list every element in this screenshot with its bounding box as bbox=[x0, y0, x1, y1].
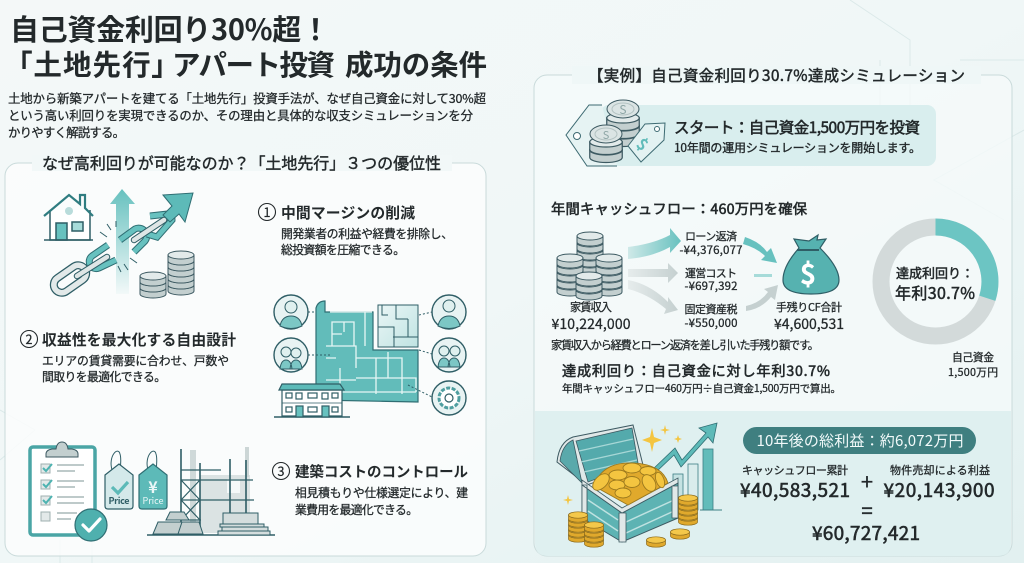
icon: money bag bbox=[783, 235, 839, 294]
chest lid bbox=[557, 425, 643, 485]
item 1: 開発業者の利益や経費を排除し、 bbox=[281, 225, 453, 242]
item 1: 総投資額を圧縮できる。 bbox=[281, 241, 405, 258]
deduction labels: ローン返済 bbox=[685, 228, 737, 244]
title: 「土地先行」 bbox=[18, 43, 166, 84]
donut label bbox=[948, 349, 998, 380]
icon: tag outline and coins: $ bbox=[632, 131, 655, 156]
price tags: Price bbox=[142, 494, 164, 507]
icon: tag outline and coins bbox=[566, 100, 665, 166]
item 2: 収益性を最大化する自由設計 bbox=[42, 329, 236, 350]
item 2 bbox=[20, 329, 236, 385]
panel heading: 【実例】自己資金利回り30.7%達成シミュレーション bbox=[588, 64, 965, 86]
item 3 bbox=[272, 461, 468, 518]
growth chart bbox=[652, 423, 722, 510]
arrows: to remainder bbox=[743, 237, 778, 311]
icon: tag outline and coins: S bbox=[603, 127, 610, 143]
calculation: 物件売却による利益 bbox=[890, 462, 990, 478]
icon: treasure chest and growth bbox=[557, 423, 722, 547]
chain bbox=[51, 214, 172, 296]
sparkles bbox=[563, 425, 682, 505]
item 3: 建築コストのコントロール bbox=[295, 461, 468, 482]
price tags bbox=[105, 451, 167, 509]
item 3: 相見積もりや仕様選定により、建 bbox=[295, 484, 468, 501]
intro text: という高い利回りを実現できるのか、その理由と具体的な収支シミュレーションを分 bbox=[8, 106, 474, 124]
start banner: スタート：自己資金1,500万円を投資 bbox=[674, 116, 920, 138]
arrows: outflows bbox=[628, 228, 681, 314]
yield result: 達成利回り：自己資金に対し年利30.7% bbox=[562, 361, 830, 381]
panel: simulation bbox=[534, 64, 1012, 556]
panel: ten year result bbox=[535, 411, 1011, 556]
item 1: 1 bbox=[264, 202, 271, 221]
calculation: = bbox=[861, 495, 873, 524]
start banner: 10年間の運用シミュレーションを開始します。 bbox=[674, 139, 921, 156]
donut chart: 年利30.7% bbox=[895, 280, 975, 304]
panel heading: なぜ高利回りが可能なのか？「土地先行」３つの優位性 bbox=[42, 150, 441, 174]
calculation: + bbox=[861, 465, 873, 497]
blueprint bbox=[316, 301, 418, 402]
calculation: キャッシュフロー累計 bbox=[742, 462, 848, 478]
start banner bbox=[566, 100, 936, 166]
item 3: 業費用を最適化できる。 bbox=[295, 501, 418, 518]
remainder label bbox=[774, 299, 844, 334]
calculation: ¥60,727,421 bbox=[812, 519, 920, 546]
donut label: 1,500万円 bbox=[948, 364, 998, 380]
deduction labels: 固定資産税 bbox=[684, 301, 738, 317]
item 3: 3 bbox=[278, 461, 285, 480]
yield result: 年間キャッシュフロー460万円÷自己資金1,500万円で算出。 bbox=[562, 381, 841, 396]
icon: checklist, tags and construction bbox=[30, 442, 275, 541]
remainder label: 手残りCF合計 bbox=[776, 299, 842, 315]
icon: blueprint, people and building bbox=[274, 295, 466, 417]
rent label bbox=[552, 299, 631, 334]
deduction labels: 運営コスト bbox=[685, 265, 737, 281]
panel: three advantages bbox=[5, 150, 486, 556]
deduction labels: -¥697,392 bbox=[684, 278, 738, 294]
icon: rent coins bbox=[557, 232, 622, 300]
gold coin stacks bbox=[568, 495, 698, 547]
people icons bbox=[274, 295, 466, 372]
cash flow heading: 年間キャッシュフロー：460万円を確保 bbox=[551, 198, 808, 219]
arrow: upward bbox=[110, 189, 135, 294]
icon: tag outline and coins: S bbox=[619, 101, 627, 118]
donut label: 自己資金 bbox=[952, 349, 994, 365]
deduction labels: -¥550,000 bbox=[684, 315, 738, 331]
price tags: Price bbox=[108, 494, 130, 507]
total profit pill: 10年後の総利益：約6,072万円 bbox=[756, 430, 964, 451]
clipboard bbox=[30, 442, 107, 541]
building bbox=[274, 384, 350, 417]
item 2: エリアの賃貸需要に合わせ、戸数や bbox=[42, 352, 229, 369]
yield result bbox=[562, 361, 841, 396]
rent label: ¥10,224,000 bbox=[552, 314, 631, 334]
icon: money bag: $ bbox=[800, 253, 816, 293]
arrow head bbox=[163, 193, 193, 222]
title: 成功の条件 bbox=[345, 43, 487, 84]
icon: house bbox=[44, 195, 93, 240]
cash flow note: 家賃収入から経費とローン返済を差し引いた手残り額です。 bbox=[551, 337, 819, 353]
intro text bbox=[8, 89, 487, 141]
total profit pill bbox=[743, 427, 976, 454]
gold pile bbox=[590, 463, 668, 505]
intro text: かりやすく解説する。 bbox=[8, 123, 125, 141]
title: アパート投資 bbox=[172, 43, 335, 84]
icon: gear bbox=[432, 381, 466, 415]
price tags: ¥ bbox=[148, 474, 158, 498]
cash flow diagram bbox=[552, 228, 844, 334]
rent label: 家賃収入 bbox=[570, 299, 612, 315]
title: 自己資金利回り30%超！ bbox=[10, 7, 330, 49]
item 2: 間取りを最適化できる。 bbox=[42, 368, 166, 385]
donut chart bbox=[881, 227, 990, 336]
calculation: ¥20,143,900 bbox=[884, 476, 994, 503]
construction bbox=[147, 447, 275, 535]
donut chart: 達成利回り： bbox=[896, 263, 974, 282]
title bbox=[10, 7, 487, 84]
item 1 bbox=[258, 202, 453, 258]
remainder label: ¥4,600,531 bbox=[774, 314, 844, 334]
calculation bbox=[740, 462, 994, 546]
intro text: 土地から新築アパートを建てる「土地先行」投資手法が、なぜ自己資金に対して30%超 bbox=[8, 89, 487, 107]
chest body bbox=[582, 483, 678, 542]
icon: coins bbox=[140, 251, 194, 298]
icon: chain, house and coins bbox=[44, 189, 194, 298]
item 1: 中間マージンの削減 bbox=[281, 202, 415, 223]
item 2: 2 bbox=[26, 329, 33, 348]
deduction labels: -¥4,376,077 bbox=[680, 242, 742, 258]
deduction labels bbox=[680, 228, 742, 331]
calculation: ¥40,583,521 bbox=[740, 476, 850, 503]
